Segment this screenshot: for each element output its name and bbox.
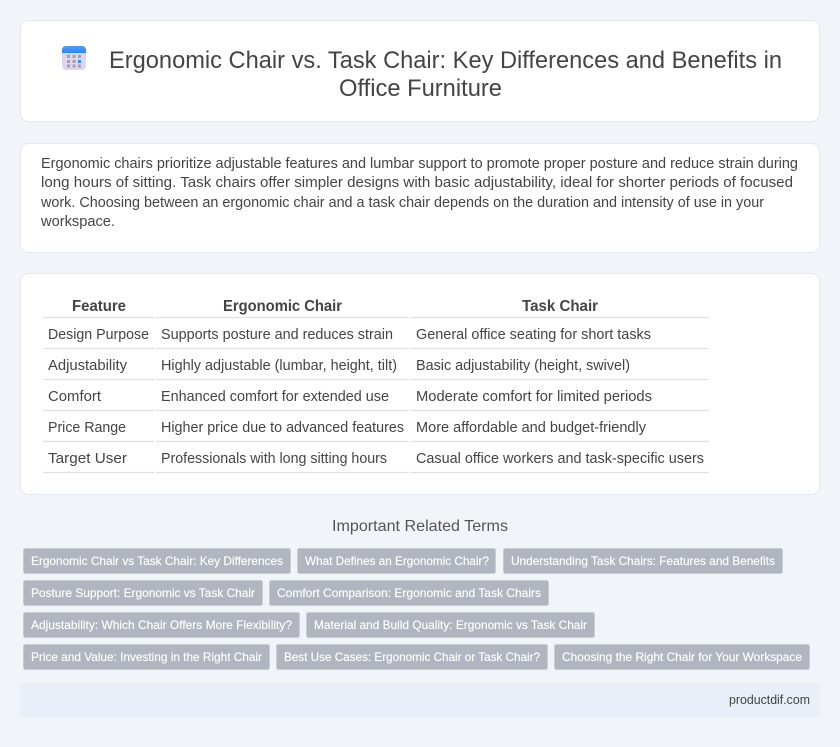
tag [24, 612, 300, 638]
tag: What Defines an Ergonomic Chair? [305, 554, 489, 568]
title [109, 47, 782, 102]
row: adjustability [48, 358, 630, 374]
tag [504, 548, 782, 574]
heading: important related terms: Important Related Terms [332, 518, 508, 535]
table header: Feature [72, 298, 126, 315]
icon: calendar [62, 46, 86, 70]
table header [72, 298, 598, 315]
row: price range: Higher price due to advanced features [161, 420, 404, 436]
row: design purpose: Supports posture and reduces strain [161, 327, 393, 343]
row: comfort [48, 389, 652, 405]
related term tags [24, 548, 810, 670]
row: price range: Price Range [48, 420, 126, 436]
row: comfort: Comfort [48, 389, 101, 405]
panel: introduction text [20, 144, 820, 252]
tag: Material and Build Quality: Ergonomic vs Task Chair [314, 618, 587, 632]
tag [306, 612, 594, 638]
tag [276, 644, 548, 670]
panel: introduction text: work. Choosing between an ergonomic chair and a task chair depends on the duration and intensity of use in your [40, 195, 764, 211]
row: price range [48, 420, 647, 436]
tag: Posture Support: Ergonomic vs Task Chair [31, 586, 255, 600]
panel: introduction text: long hours of sitting. Task chairs offer simpler designs with basic adjustability, ideal for shorter periods of focused [41, 175, 793, 191]
tag: Best Use Cases: Ergonomic Chair or Task Chair? [284, 650, 540, 664]
panel: header [20, 20, 820, 122]
row: design purpose: General office seating for short tasks [416, 327, 651, 343]
tag [24, 644, 270, 670]
row: price range: More affordable and budget-friendly [416, 420, 647, 436]
tag [298, 548, 496, 574]
row: adjustability: Basic adjustability (height, swivel) [416, 358, 630, 374]
table header: Task Chair [522, 298, 598, 315]
title: Office Furniture [339, 75, 502, 102]
panel: introduction text: workspace. [40, 214, 115, 230]
tag [24, 548, 290, 574]
panel: comparison table [20, 274, 820, 494]
row: adjustability: Highly adjustable (lumbar, height, tilt) [161, 358, 397, 374]
tag [554, 644, 810, 670]
footer [20, 683, 820, 717]
tag: Choosing the Right Chair for Your Workspace [562, 650, 802, 664]
tag: Ergonomic Chair vs Task Chair: Key Differences [31, 554, 283, 568]
title: Ergonomic Chair vs. Task Chair: Key Differences and Benefits in [109, 47, 782, 74]
footer: productdif.com [729, 693, 810, 707]
tag: Adjustability: Which Chair Offers More Flexibility? [31, 618, 292, 632]
row: comfort: Enhanced comfort for extended use [161, 389, 389, 405]
row: target user [48, 451, 704, 467]
tag [24, 580, 262, 606]
row: target user: Casual office workers and task-specific users [416, 451, 704, 467]
row: comfort: Moderate comfort for limited periods [416, 389, 652, 405]
tag: Comfort Comparison: Ergonomic and Task Chairs [277, 586, 541, 600]
row: target user: Professionals with long sitting hours [161, 451, 387, 467]
tag [270, 580, 548, 606]
row: design purpose: Design Purpose [48, 327, 149, 343]
panel: introduction text: Ergonomic chairs prioritize adjustable features and lumbar support to promote proper posture and reduce strain during [41, 156, 798, 172]
table header: Ergonomic Chair [223, 298, 342, 315]
tag: Understanding Task Chairs: Features and Benefits [511, 554, 775, 568]
tag: Price and Value: Investing in the Right Chair [31, 650, 262, 664]
row: design purpose [48, 327, 651, 343]
row: target user: Target User [48, 451, 127, 467]
row: adjustability: Adjustability [48, 358, 128, 374]
